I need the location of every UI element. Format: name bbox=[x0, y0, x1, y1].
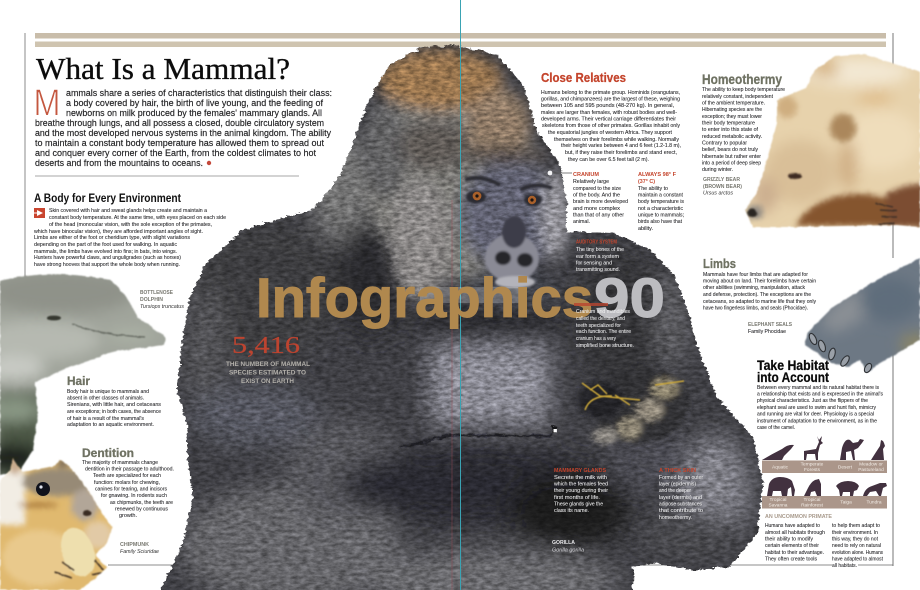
section: Take Habitat into Account: instrument of adaptation to the environment, as in the bbox=[757, 418, 877, 424]
callout: thick skin: adipose substances bbox=[659, 502, 702, 508]
callout: auditory system: for sensing and bbox=[576, 260, 612, 266]
section: A Body for Every Environment: depending on the part of the foot used for walking. In aquatic bbox=[34, 242, 177, 248]
skin crease bbox=[400, 435, 552, 448]
callout: mammary glands: which the females feed bbox=[553, 482, 608, 488]
fruit stalks bbox=[582, 381, 684, 410]
section: Homeothermy: Contrary to popular bbox=[702, 140, 747, 146]
section: Homeothermy bbox=[702, 71, 785, 173]
callout: cranium: brain is more developed bbox=[573, 199, 628, 205]
intro paragraph bbox=[35, 88, 332, 169]
section: An Uncommon Primate bbox=[765, 514, 883, 569]
callout: thick skin bbox=[659, 468, 703, 521]
drop cap: M bbox=[34, 82, 60, 124]
photo: chipmunk bbox=[0, 455, 120, 590]
callout: mandible: each function. The entire bbox=[576, 329, 631, 335]
section: A Body for Every Environment: of the head (monocular vision, with the sole exception of the primates, bbox=[49, 222, 212, 228]
section: Take Habitat into Account bbox=[757, 358, 883, 431]
habitat labels: Rainforest bbox=[801, 502, 824, 508]
photo: bottlenose dolphin bbox=[0, 273, 166, 476]
callout: auditory system: AUDITORY SYSTEM bbox=[576, 240, 617, 246]
hand bbox=[578, 367, 688, 444]
caption: bottlenose dolphin: Tursiops truncatus bbox=[140, 304, 184, 310]
section: A Body for Every Environment: Limbs are either of the foot or cheridium type, with slight variations bbox=[34, 235, 190, 241]
callout: cranium: animal. bbox=[573, 219, 590, 225]
callout: always 98 F: not a characteristic bbox=[638, 206, 683, 212]
habitat labels: Taiga bbox=[840, 500, 852, 506]
statistic: 5,416 species: THE NUMBER OF MAMMAL bbox=[226, 361, 310, 368]
intro paragraph: and conquer every corner of the Earth, from the coldest climates to hot bbox=[35, 148, 316, 159]
callout: mandible: Cranium and mandibles bbox=[576, 309, 630, 315]
intro paragraph: newborns on milk produced by the females' mammary glands. All bbox=[66, 108, 322, 119]
section: An Uncommon Primate: AN UNCOMMON PRIMATE bbox=[765, 514, 832, 520]
section: Limbs: moving about on land. Their forelimbs have certain bbox=[703, 278, 816, 284]
section: Close Relatives: themselves on their forelimbs while walking. Normally bbox=[554, 137, 679, 143]
section: Take Habitat into Account: physical characteristics. Just as the flippers of the bbox=[757, 398, 868, 404]
section: An Uncommon Primate: have adapted to almost bbox=[832, 556, 883, 562]
section: Close Relatives: Humans belong to the primate group. Hominids (orangutans, bbox=[541, 90, 680, 96]
callout: mammary glands: These glands give the bbox=[554, 502, 603, 508]
habitat labels: Temperate bbox=[801, 462, 824, 468]
section: Dentition: function: molars for chewing, bbox=[94, 480, 160, 486]
section: Hair: of hair is a result of the mammal's bbox=[67, 416, 144, 422]
caption: chipmunk: Family Sciuridae bbox=[120, 549, 159, 555]
section: Dentition: growth. bbox=[119, 513, 137, 519]
section: Homeothermy: relatively constant, independent bbox=[702, 94, 773, 100]
callout: auditory system bbox=[576, 240, 624, 273]
section: Homeothermy: of the ambient temperature. bbox=[702, 100, 765, 106]
section: An Uncommon Primate: need to rely on natural bbox=[832, 543, 881, 549]
section: Hair: Body hair is unique to mammals and bbox=[67, 389, 149, 395]
section: Dentition: as chipmunks, the teeth are bbox=[110, 500, 173, 506]
callout: thick skin: Formed by an outer bbox=[659, 475, 703, 481]
section: Limbs bbox=[703, 256, 816, 312]
section: Close Relatives: the equatorial jungles of western Africa. They support bbox=[548, 130, 672, 136]
guide lines bbox=[452, 0, 460, 590]
statistic: 5,416 species: SPECIES ESTIMATED TO bbox=[229, 370, 306, 376]
section: An Uncommon Primate: their ability to modify bbox=[765, 536, 813, 542]
callout: cranium: CRANIUM bbox=[573, 172, 599, 178]
section: Take Habitat into Account: elephant seal are used to swim and hunt fish, mimicry bbox=[757, 405, 876, 411]
callout: thick skin: that contribute to bbox=[659, 508, 703, 514]
section: Limbs: Limbs bbox=[703, 256, 736, 271]
intro paragraph: deserts and from the mountains to oceans. bbox=[35, 158, 203, 169]
caption: bottlenose dolphin: BOTTLENOSE bbox=[140, 290, 173, 296]
section: An Uncommon Primate: almost all habitats through bbox=[765, 530, 825, 536]
callout: always 98 F: (37° C) bbox=[638, 179, 655, 185]
caption: chipmunk: CHIPMUNK bbox=[120, 542, 150, 548]
section: Close Relatives: they can be over 6.5 feet tall (2 m). bbox=[568, 157, 649, 163]
photo: grizzly bear bbox=[740, 50, 920, 230]
section: Close Relatives: their height varies between 4 and 6 feet (1.2-1.8 m), bbox=[561, 143, 681, 149]
callout: mandible: called the dentary, and bbox=[576, 316, 625, 322]
caption: grizzly bear bbox=[703, 177, 742, 196]
habitat labels: Aquatic bbox=[772, 464, 789, 470]
section: Limbs: and defense, protection). The exceptions are the bbox=[703, 292, 811, 298]
callout: always 98 F: ability. bbox=[638, 226, 653, 232]
section: A Body for Every Environment bbox=[33, 193, 226, 268]
callout: always 98 F: unique to mammals; bbox=[638, 212, 684, 218]
section: Homeothermy: The ability to keep body temperature bbox=[702, 87, 785, 93]
section: An Uncommon Primate: certain elements of their bbox=[765, 543, 819, 549]
watermark wordmark: 90 bbox=[594, 266, 665, 329]
callout: cranium: compared to the size bbox=[573, 186, 621, 192]
caption: grizzly bear: Ursus arctos bbox=[703, 190, 733, 196]
caption: gorilla: Gorilla gorilla bbox=[552, 548, 584, 554]
section: Limbs: Mammals have four limbs that are adapted for bbox=[703, 272, 808, 278]
section: Hair: Hair bbox=[67, 374, 90, 388]
caption: gorilla bbox=[552, 540, 584, 554]
section: A Body for Every Environment: have strong hooves that support the whole body when running. bbox=[34, 262, 180, 268]
caption: grizzly bear: (BROWN BEAR) bbox=[703, 184, 742, 190]
callout: auditory system: ear form a system bbox=[576, 254, 619, 260]
callout: always 98 F: maintain a constant bbox=[638, 192, 683, 198]
section: Hair: Sirenians, with little hair, and cetaceans bbox=[67, 402, 161, 408]
intro paragraph: and the most developed nervous systems in the animal kingdom. The ability bbox=[35, 128, 331, 139]
section: Limbs: cetaceans, so adapted to marine life that they only bbox=[703, 299, 816, 305]
caption: elephant seals bbox=[748, 322, 792, 335]
section: Close Relatives bbox=[541, 70, 681, 163]
section: Take Habitat into Account: into Account bbox=[757, 370, 829, 385]
section: Homeothermy: to enter into this state of bbox=[702, 127, 758, 133]
section: Take Habitat into Account: Take Habitat bbox=[757, 358, 829, 373]
habitat labels: Desert bbox=[838, 464, 853, 470]
section: A Body for Every Environment: which have binocular vision), they are afforded important angles of sight. bbox=[33, 229, 203, 235]
callout: mammary glands: their young during their bbox=[554, 488, 608, 494]
section: Dentition: dentition in their passage to adulthood. bbox=[85, 466, 174, 472]
section: Dentition: Teeth are specialized for each bbox=[93, 473, 161, 479]
callout: thick skin: homeothermy. bbox=[659, 515, 692, 521]
callout: thick skin: layer (dermis) and bbox=[659, 495, 702, 501]
section: Close Relatives: skeletons from those of other primates. Gorillas inhabit only bbox=[542, 123, 680, 129]
section: A Body for Every Environment: Skin covered with hair and sweat glands helps create and maintain a bbox=[49, 208, 208, 214]
watermark wordmark: Infographics bbox=[256, 266, 593, 329]
habitat labels: Tropical bbox=[804, 497, 820, 503]
habitat labels: Tundra bbox=[866, 500, 882, 506]
section: A Body for Every Environment: mammals, the limbs have evolved into fins; in bats, into wings. bbox=[34, 249, 177, 255]
section: An Uncommon Primate: Humans have adapted to bbox=[765, 523, 820, 529]
callout: mammary glands: Secrete the milk with bbox=[554, 475, 607, 481]
callout: always 98 F: The ability to bbox=[638, 186, 668, 192]
section: Homeothermy: belief, bears do not truly bbox=[702, 147, 758, 153]
icon: red arrow marker bbox=[34, 208, 45, 218]
caption: bottlenose dolphin: DOLPHIN bbox=[140, 297, 163, 303]
habitat silhouettes bbox=[762, 436, 887, 496]
section: Close Relatives: developed arms. Their vertical carriage differentiates their bbox=[541, 116, 676, 122]
section: Close Relatives: but, if they raise their forelimbs and stand erect, bbox=[565, 150, 677, 156]
callout: cranium: than that of any other bbox=[573, 212, 624, 218]
caption: elephant seals: Family Phocidae bbox=[748, 329, 786, 335]
section: Homeothermy: reduced metabolic activity. bbox=[702, 134, 762, 140]
section: An Uncommon Primate: habitat to their advantage. bbox=[765, 550, 824, 556]
section: Hair: are exceptions; in both cases, the absence bbox=[67, 409, 161, 415]
section: Homeothermy: Homeothermy bbox=[702, 71, 782, 87]
section: A Body for Every Environment: constant body temperature. At the same time, with eyes placed on each side bbox=[49, 215, 226, 221]
habitat labels: Tropical bbox=[770, 497, 786, 503]
habitat labels: Savanna bbox=[769, 502, 788, 508]
habitat labels: Meadow or bbox=[859, 462, 883, 468]
callout: mandible: teeth specialized for bbox=[576, 323, 621, 329]
section: An Uncommon Primate: to help them adapt to bbox=[832, 523, 880, 529]
intro paragraph: ammals share a series of characteristics that distinguish their class: bbox=[66, 88, 332, 99]
section: Dentition: The majority of mammals change bbox=[82, 460, 158, 466]
section: Dentition bbox=[82, 446, 174, 519]
caption: elephant seals: ELEPHANT SEALS bbox=[748, 322, 792, 328]
intro paragraph: to maintain a constant body temperature has allowed them to spread out bbox=[35, 138, 324, 149]
callout: always 98 F: birds also have that bbox=[638, 219, 682, 225]
section: Close Relatives: Close Relatives bbox=[541, 70, 626, 85]
intro paragraph: breathe through lungs, and all possess a closed, double circulatory system bbox=[35, 118, 324, 129]
callout: cranium: and more complex bbox=[573, 206, 620, 212]
callout: cranium: of the body. And the bbox=[573, 192, 620, 198]
caption: grizzly bear: GRIZZLY BEAR bbox=[703, 177, 740, 183]
section: Close Relatives: between 105 and 595 pounds (48-270 kg). In general, bbox=[541, 103, 674, 109]
section: An Uncommon Primate: this way, they do not bbox=[832, 536, 878, 542]
section: Take Habitat into Account: and running are vital for deer. Physiology is a special bbox=[757, 412, 874, 418]
section: An Uncommon Primate: all habitats. bbox=[832, 563, 857, 569]
statistic: 5,416 species: 5,416 bbox=[232, 333, 300, 359]
section: Close Relatives: gorillas, and chimpanzees) are the largest of these, weighing bbox=[541, 96, 680, 102]
callout: mandible: simplified bone structure. bbox=[576, 343, 634, 349]
callout: mammary glands bbox=[553, 429, 608, 514]
section: Limbs: have two fingerless limbs, and seals (Phocidae). bbox=[703, 306, 808, 312]
callout: mammary glands: class its name. bbox=[554, 508, 589, 514]
statistic: 5,416 species: EXIST ON EARTH bbox=[241, 378, 294, 385]
section: Hair: absent in other classes of animals. bbox=[67, 396, 144, 402]
callout: always 98 F bbox=[638, 172, 684, 232]
callout: mandible: cranium has a very bbox=[576, 336, 616, 342]
callout: mammary glands: first months of life. bbox=[554, 495, 600, 501]
section: An Uncommon Primate: They often create tools bbox=[765, 556, 817, 562]
section: Take Habitat into Account: Between every mammal and its natural habitat there is bbox=[757, 385, 879, 391]
section: A Body for Every Environment: Hunters have powerful claws, and unguligrades (such as horses) bbox=[34, 255, 181, 261]
statistic: 5,416 species bbox=[226, 333, 310, 385]
section: Limbs: other abilities (swimming, manipulation, attack bbox=[703, 285, 805, 291]
habitat chart bbox=[762, 436, 887, 508]
section: Take Habitat into Account: a relationship that exists and is expressed in the animal's bbox=[757, 392, 883, 398]
callout: auditory system: The tiny bones of the bbox=[576, 247, 624, 253]
section: Hair: adaptation to an aquatic environment. bbox=[67, 422, 154, 428]
section: Dentition: Dentition bbox=[82, 446, 134, 460]
section: Hair bbox=[67, 374, 161, 428]
photo: elephant seal flipper bbox=[804, 258, 920, 374]
caption: chipmunk bbox=[120, 542, 159, 555]
section: Dentition: renewed by continuous bbox=[115, 506, 168, 512]
section: Dentition: canines for tearing, and incisors bbox=[95, 486, 167, 492]
callout: auditory system: transmitting sound. bbox=[576, 267, 620, 273]
section: Homeothermy: their body temperature bbox=[702, 120, 755, 126]
gorilla face bbox=[465, 178, 552, 288]
section: Close Relatives: males are larger than females, with robust bodies and well- bbox=[541, 110, 677, 116]
section: Homeothermy: exception; they must lower bbox=[702, 114, 762, 120]
section: Homeothermy: hibernate but rather enter bbox=[702, 154, 761, 160]
caption: bottlenose dolphin bbox=[140, 290, 184, 310]
callout: mammary glands: MAMMARY GLANDS bbox=[554, 468, 606, 474]
callout: thick skin: A THICK SKIN bbox=[659, 468, 696, 474]
section: Dentition: for gnawing. In rodents such bbox=[101, 493, 167, 499]
callout: mandible bbox=[576, 309, 634, 349]
section: An Uncommon Primate: their environment. In bbox=[832, 530, 878, 536]
header stripes bbox=[35, 33, 886, 47]
habitat labels: Forests bbox=[804, 467, 821, 473]
callout: thick skin: layer (epidermis) bbox=[659, 482, 696, 488]
callout: cranium bbox=[548, 171, 628, 225]
section: Homeothermy: during winter. bbox=[702, 167, 733, 173]
title: What Is a Mammal? bbox=[36, 51, 290, 86]
caption: gorilla: GORILLA bbox=[552, 540, 575, 546]
callout: always 98 F: ALWAYS 98° F bbox=[638, 172, 677, 178]
section: Take Habitat into Account: case of the camel. bbox=[757, 425, 795, 431]
habitat labels bbox=[769, 462, 884, 508]
callout: thick skin: and the deeper bbox=[659, 488, 691, 494]
habitat labels: Pastureland bbox=[858, 467, 884, 473]
photo: gorilla bbox=[150, 40, 780, 590]
section: Homeothermy: into a period of deep sleep bbox=[702, 160, 761, 166]
section: An Uncommon Primate: evolution alone. Humans bbox=[832, 550, 883, 556]
section: A Body for Every Environment: A Body for Every Environment bbox=[34, 193, 181, 205]
section: Homeothermy: Hibernating species are the bbox=[702, 107, 762, 113]
callout: cranium: Relatively large bbox=[573, 179, 609, 185]
callout: always 98 F: body temperature is bbox=[638, 199, 684, 205]
intro paragraph: a body covered by hair, the birth of live young, and the feeding of bbox=[66, 98, 323, 109]
